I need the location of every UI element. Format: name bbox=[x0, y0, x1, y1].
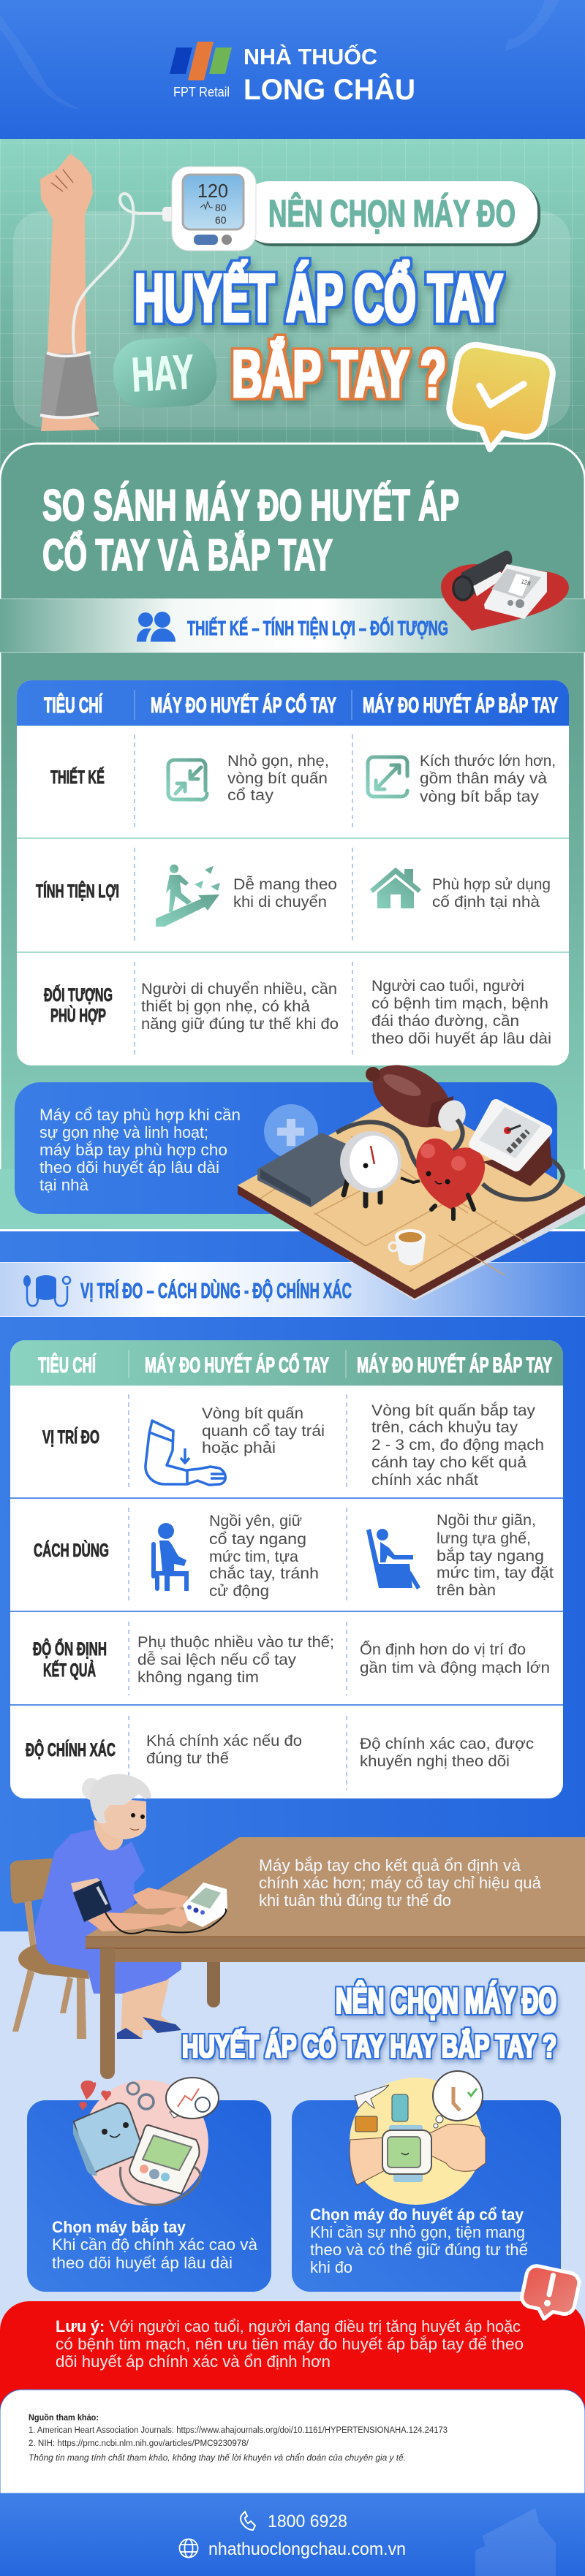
panel: chọn máy đo huyết áp cổ tay: Khi cần sự nhỏ gọn, tiện mang bbox=[310, 2223, 525, 2241]
logo: FPT Retail Long Châu: FPT Retail bbox=[173, 85, 230, 99]
row: độ chính xác: ĐỘ CHÍNH XÁC bbox=[26, 1739, 116, 1760]
row: thiết kế: Kích thước lớn hơn, bbox=[420, 753, 556, 770]
legs and shoes bbox=[117, 1977, 181, 2039]
callout: máy cổ tay: Máy cổ tay phù hợp khi cần bbox=[39, 1106, 241, 1124]
icon: warning badge bbox=[518, 2264, 581, 2325]
footer: nhathuoclongchau.com.vn bbox=[208, 2539, 406, 2559]
row: vị trí đo bbox=[42, 1402, 544, 1489]
icon: arm outline bbox=[146, 1421, 225, 1485]
row: độ ổn định kết quả: gần tim và động mạch lớn bbox=[360, 1660, 550, 1676]
panel: nguồn tham khảo bbox=[0, 2390, 585, 2493]
icon: blood pressure monitor: 60 bbox=[215, 214, 227, 226]
illustration: upper arm cuff and monitor bbox=[73, 2078, 219, 2205]
row: vị trí đo: hoặc phải bbox=[202, 1440, 276, 1456]
heading: so sánh bbox=[42, 481, 459, 580]
table bbox=[86, 1837, 585, 2079]
head bbox=[82, 1774, 151, 1850]
subheading band: vị trí đo bbox=[0, 1262, 585, 1317]
callout: máy cổ tay bbox=[15, 1082, 557, 1214]
row: cách dùng: cử động bbox=[209, 1583, 269, 1600]
panel: chọn máy đo huyết áp cổ tay: Chọn máy đo huyết áp cổ tay bbox=[310, 2205, 524, 2224]
panel: nguồn tham khảo: Thông tin mang tính chất tham khảo, không thay thế lời khuyên và chẩn đoán của chuyên gia y tế. bbox=[29, 2454, 406, 2463]
subheading band: thiết kế bbox=[0, 599, 585, 653]
text: máy bắp tay bbox=[259, 1856, 542, 1910]
row: cách dùng: mức tim, tay đặt bbox=[437, 1565, 554, 1581]
row: tính tiện lợi: Phù hợp sử dụng bbox=[432, 876, 551, 893]
icon: compress bbox=[168, 760, 207, 799]
table header bbox=[10, 1340, 563, 1386]
icon: house bbox=[370, 867, 421, 908]
panel: chọn máy bắp tay: theo dõi huyết áp lâu dài bbox=[52, 2254, 233, 2272]
row: độ chính xác: đúng tư thế bbox=[146, 1750, 229, 1767]
icon: seated person bbox=[151, 1523, 189, 1591]
row: cách dùng: lưng tựa ghế, bbox=[437, 1530, 531, 1547]
heading: bắp tay: BẮP TAY ? bbox=[232, 337, 446, 411]
logo: FPT Retail Long Châu: LONG CHÂU bbox=[244, 72, 415, 106]
row: vị trí đo: trên, cách khuỷu tay bbox=[371, 1419, 518, 1436]
row: vị trí đo: cánh tay cho kết quả bbox=[371, 1454, 526, 1471]
panel: chọn máy đo huyết áp cổ tay: theo và có thể giữ đúng tư thế bbox=[310, 2241, 528, 2259]
row: thiết kế: vòng bít quấn bbox=[227, 770, 328, 787]
subheading band: vị trí đo: VỊ TRÍ ĐO – CÁCH DÙNG - ĐỘ CHÍNH XÁC bbox=[80, 1278, 352, 1303]
panel: chọn máy bắp tay: Chọn máy bắp tay bbox=[52, 2218, 186, 2236]
row: cách dùng: cổ tay ngang bbox=[209, 1531, 306, 1548]
cuff bbox=[257, 1133, 346, 1207]
row: độ ổn định kết quả: Phụ thuộc nhiều vào tư thế; bbox=[137, 1634, 334, 1651]
table header: MÁY ĐO HUYẾT ÁP CỔ TAY bbox=[151, 693, 336, 718]
icon: people bbox=[137, 612, 176, 642]
callout: máy cổ tay: theo dõi huyết áp lâu dài bbox=[39, 1158, 219, 1177]
row: đối tượng phù hợp bbox=[44, 978, 551, 1047]
gauge character bbox=[340, 1131, 401, 1206]
row: độ chính xác: Độ chính xác cao, được bbox=[360, 1736, 534, 1752]
arms bbox=[71, 1878, 189, 1931]
row: đối tượng phù hợp: năng giữ đúng tư thế khi đo bbox=[141, 1016, 339, 1033]
row: đối tượng phù hợp: thiết bị gọn nhẹ, có khả bbox=[141, 998, 310, 1015]
row: vị trí đo: Vòng bít quấn bbox=[202, 1405, 303, 1422]
icon: phone bbox=[241, 2512, 255, 2530]
icon: expand bbox=[368, 757, 407, 797]
row: vị trí đo: Vòng bít quấn bắp tay bbox=[371, 1402, 536, 1419]
panel: lưu ý: dõi huyết áp chính xác và ổn định hơn bbox=[56, 2352, 331, 2371]
text: máy bắp tay: chính xác hơn; máy cổ tay chỉ hiệu quả bbox=[259, 1874, 542, 1892]
panel: chọn máy đo huyết áp cổ tay: khi đo bbox=[310, 2258, 352, 2276]
table header: TIÊU CHÍ bbox=[44, 693, 102, 718]
panel: lưu ý: có bệnh tim mạch, nên ưu tiên máy đo huyết áp bắp tay để theo bbox=[56, 2335, 524, 2353]
row: đối tượng phù hợp: đái tháo đường, cần bbox=[371, 1013, 519, 1030]
row: độ chính xác: Khá chính xác nếu đo bbox=[146, 1733, 302, 1749]
table header: MÁY ĐO HUYẾT ÁP CỔ TAY bbox=[145, 1353, 329, 1378]
logo: FPT Retail Long Châu bbox=[170, 42, 415, 106]
row: độ ổn định kết quả: ĐỘ ỔN ĐỊNH bbox=[33, 1638, 107, 1660]
bulb bbox=[362, 1052, 471, 1140]
watermark: store bbox=[475, 2508, 556, 2576]
row: cách dùng: trên bàn bbox=[437, 1582, 496, 1599]
callout pill: nên chọn máy đo bbox=[241, 181, 540, 246]
row: cách dùng: CÁCH DÙNG bbox=[34, 1539, 109, 1561]
illustration: wrist monitor bbox=[350, 2071, 486, 2205]
panel: nguồn tham khảo: 1. American Heart Association Journals: https://www.ahajournals.org/doi/10.1161/HYPERTENSIONAHA.124.24173 bbox=[29, 2426, 448, 2435]
row: tính tiện lợi: TÍNH TIỆN LỢI bbox=[36, 880, 119, 902]
badge: hay: HAY bbox=[130, 344, 195, 401]
row: độ ổn định kết quả: dễ sai lệch nếu cổ tay bbox=[137, 1652, 297, 1668]
row: thiết kế: gồm thân máy và bbox=[420, 770, 547, 787]
row: cách dùng: mức tim, tựa bbox=[209, 1549, 298, 1565]
row: vị trí đo: VỊ TRÍ ĐO bbox=[42, 1426, 99, 1448]
illustration: upper arm monitor on heart: 128 bbox=[520, 578, 532, 588]
heart character bbox=[401, 1139, 485, 1219]
text: máy bắp tay: khi tuân thủ đúng tư thế đo bbox=[259, 1891, 451, 1910]
table 1 bbox=[17, 680, 569, 1065]
row: độ chính xác bbox=[26, 1733, 534, 1770]
badge: hay bbox=[112, 335, 218, 410]
cuff bbox=[73, 1880, 112, 1922]
row: đối tượng phù hợp: PHÙ HỢP bbox=[50, 1004, 106, 1026]
device and wire bbox=[105, 1882, 227, 1934]
table header: TIÊU CHÍ bbox=[38, 1353, 96, 1378]
row: thiết kế: Nhỏ gọn, nhẹ, bbox=[227, 753, 329, 770]
row: thiết kế: cổ tay bbox=[227, 787, 274, 804]
row: vị trí đo: 2 - 3 cm, đo động mạch bbox=[371, 1437, 544, 1454]
icon: cuff and bulb bbox=[23, 1275, 70, 1306]
icon: blood pressure monitor: 120 bbox=[197, 180, 228, 202]
subheading band: thiết kế: THIẾT KẾ – TÍNH TIỆN LỢI – ĐỐI TƯỢNG bbox=[187, 616, 448, 639]
row: độ chính xác: khuyến nghị theo dõi bbox=[360, 1753, 510, 1770]
row: độ ổn định kết quả bbox=[33, 1634, 550, 1686]
row: thiết kế bbox=[50, 753, 556, 805]
coffee cup bbox=[389, 1229, 426, 1266]
row: thiết kế: THIẾT KẾ bbox=[50, 767, 105, 788]
panel: lưu ý bbox=[0, 2301, 585, 2412]
row: đối tượng phù hợp: có bệnh tim mạch, bệnh bbox=[371, 995, 548, 1012]
section 2 background bbox=[0, 1229, 585, 2341]
icon: recliner bbox=[366, 1529, 420, 1589]
heading: so sánh: CỔ TAY VÀ BẮP TAY bbox=[42, 531, 333, 580]
row: cách dùng: Ngồi thư giãn, bbox=[437, 1512, 536, 1529]
icon: globe bbox=[180, 2539, 197, 2558]
row: vị trí đo: quanh cổ tay trái bbox=[202, 1423, 325, 1440]
icon: walking up arrow bbox=[156, 865, 220, 927]
illustration: elderly woman at table bbox=[10, 1774, 585, 2079]
callout: máy cổ tay: sự gọn nhẹ và linh hoạt; bbox=[39, 1123, 208, 1141]
row: độ ổn định kết quả: Ổn định hơn do vị trí đo bbox=[360, 1641, 526, 1658]
illustration: arm with cuff bbox=[40, 153, 162, 431]
panel: chọn máy bắp tay bbox=[27, 2078, 271, 2292]
row: vị trí đo: chính xác nhất bbox=[371, 1472, 478, 1489]
callout: máy cổ tay: máy bắp tay phù hợp cho bbox=[39, 1141, 227, 1159]
row: đối tượng phù hợp: Người cao tuổi, người bbox=[371, 978, 524, 995]
row: cách dùng: bắp tay ngang bbox=[437, 1548, 544, 1565]
illustration: upper arm monitor on heart bbox=[441, 550, 569, 631]
row: độ ổn định kết quả: KẾT QUẢ bbox=[43, 1659, 96, 1681]
panel: chọn máy đo huyết áp cổ tay bbox=[292, 2071, 561, 2292]
panel: nguồn tham khảo: Nguồn tham khảo: bbox=[29, 2414, 99, 2423]
row: đối tượng phù hợp: Người di chuyển nhiều, cần bbox=[141, 981, 337, 998]
row: cách dùng: chắc tay, tránh bbox=[209, 1565, 319, 1582]
hero panel bbox=[0, 139, 585, 487]
logo: FPT Retail Long Châu: NHÀ THUỐC bbox=[244, 43, 377, 69]
row: độ ổn định kết quả: không ngang tim bbox=[137, 1669, 259, 1686]
icon: blood pressure monitor bbox=[162, 167, 256, 251]
header band bbox=[0, 0, 585, 139]
row: tính tiện lợi: Dễ mang theo bbox=[233, 876, 337, 893]
footer: 1800 6928 bbox=[268, 2512, 347, 2531]
row: cách dùng: Ngồi yên, giữ bbox=[209, 1513, 302, 1530]
callout: máy cổ tay: tại nhà bbox=[39, 1176, 89, 1194]
panel: chọn máy bắp tay: Khi cần độ chính xác cao và bbox=[52, 2235, 258, 2254]
dress bbox=[34, 1829, 181, 1994]
heading: nên chọn máy đo bbox=[182, 1980, 556, 2064]
icon: blood pressure monitor: 80 bbox=[215, 202, 227, 213]
panel: nguồn tham khảo: 2. NIH: https://pmc.ncbi.nlm.nih.gov/articles/PMC9230978/ bbox=[29, 2439, 249, 2448]
table header bbox=[17, 680, 569, 726]
row: thiết kế: vòng bít bắp tay bbox=[420, 789, 540, 805]
text: máy bắp tay: Máy bắp tay cho kết quả ổn định và bbox=[259, 1856, 521, 1874]
footer bbox=[0, 2493, 585, 2576]
row: tính tiện lợi: cố định tại nhà bbox=[432, 894, 540, 911]
section 1 background bbox=[0, 444, 585, 1229]
row: đối tượng phù hợp: theo dõi huyết áp lâu dài bbox=[371, 1030, 551, 1047]
row: tính tiện lợi bbox=[36, 865, 551, 927]
row: cách dùng bbox=[34, 1512, 554, 1600]
plus bubble bbox=[264, 1104, 318, 1158]
row: tính tiện lợi: khi di chuyển bbox=[233, 894, 327, 911]
panel: lưu ý: Lưu ý: Với người cao tuổi, người đang điều trị tăng huyết áp hoặc bbox=[56, 2317, 521, 2336]
row: đối tượng phù hợp: ĐỐI TƯỢNG bbox=[44, 984, 113, 1006]
icon: check badge bbox=[443, 342, 556, 458]
illustration: sphygmomanometer on board bbox=[238, 1052, 585, 1301]
table 2 bbox=[10, 1340, 563, 1798]
pressure meter bbox=[469, 1099, 552, 1186]
chair bbox=[10, 1858, 89, 2039]
